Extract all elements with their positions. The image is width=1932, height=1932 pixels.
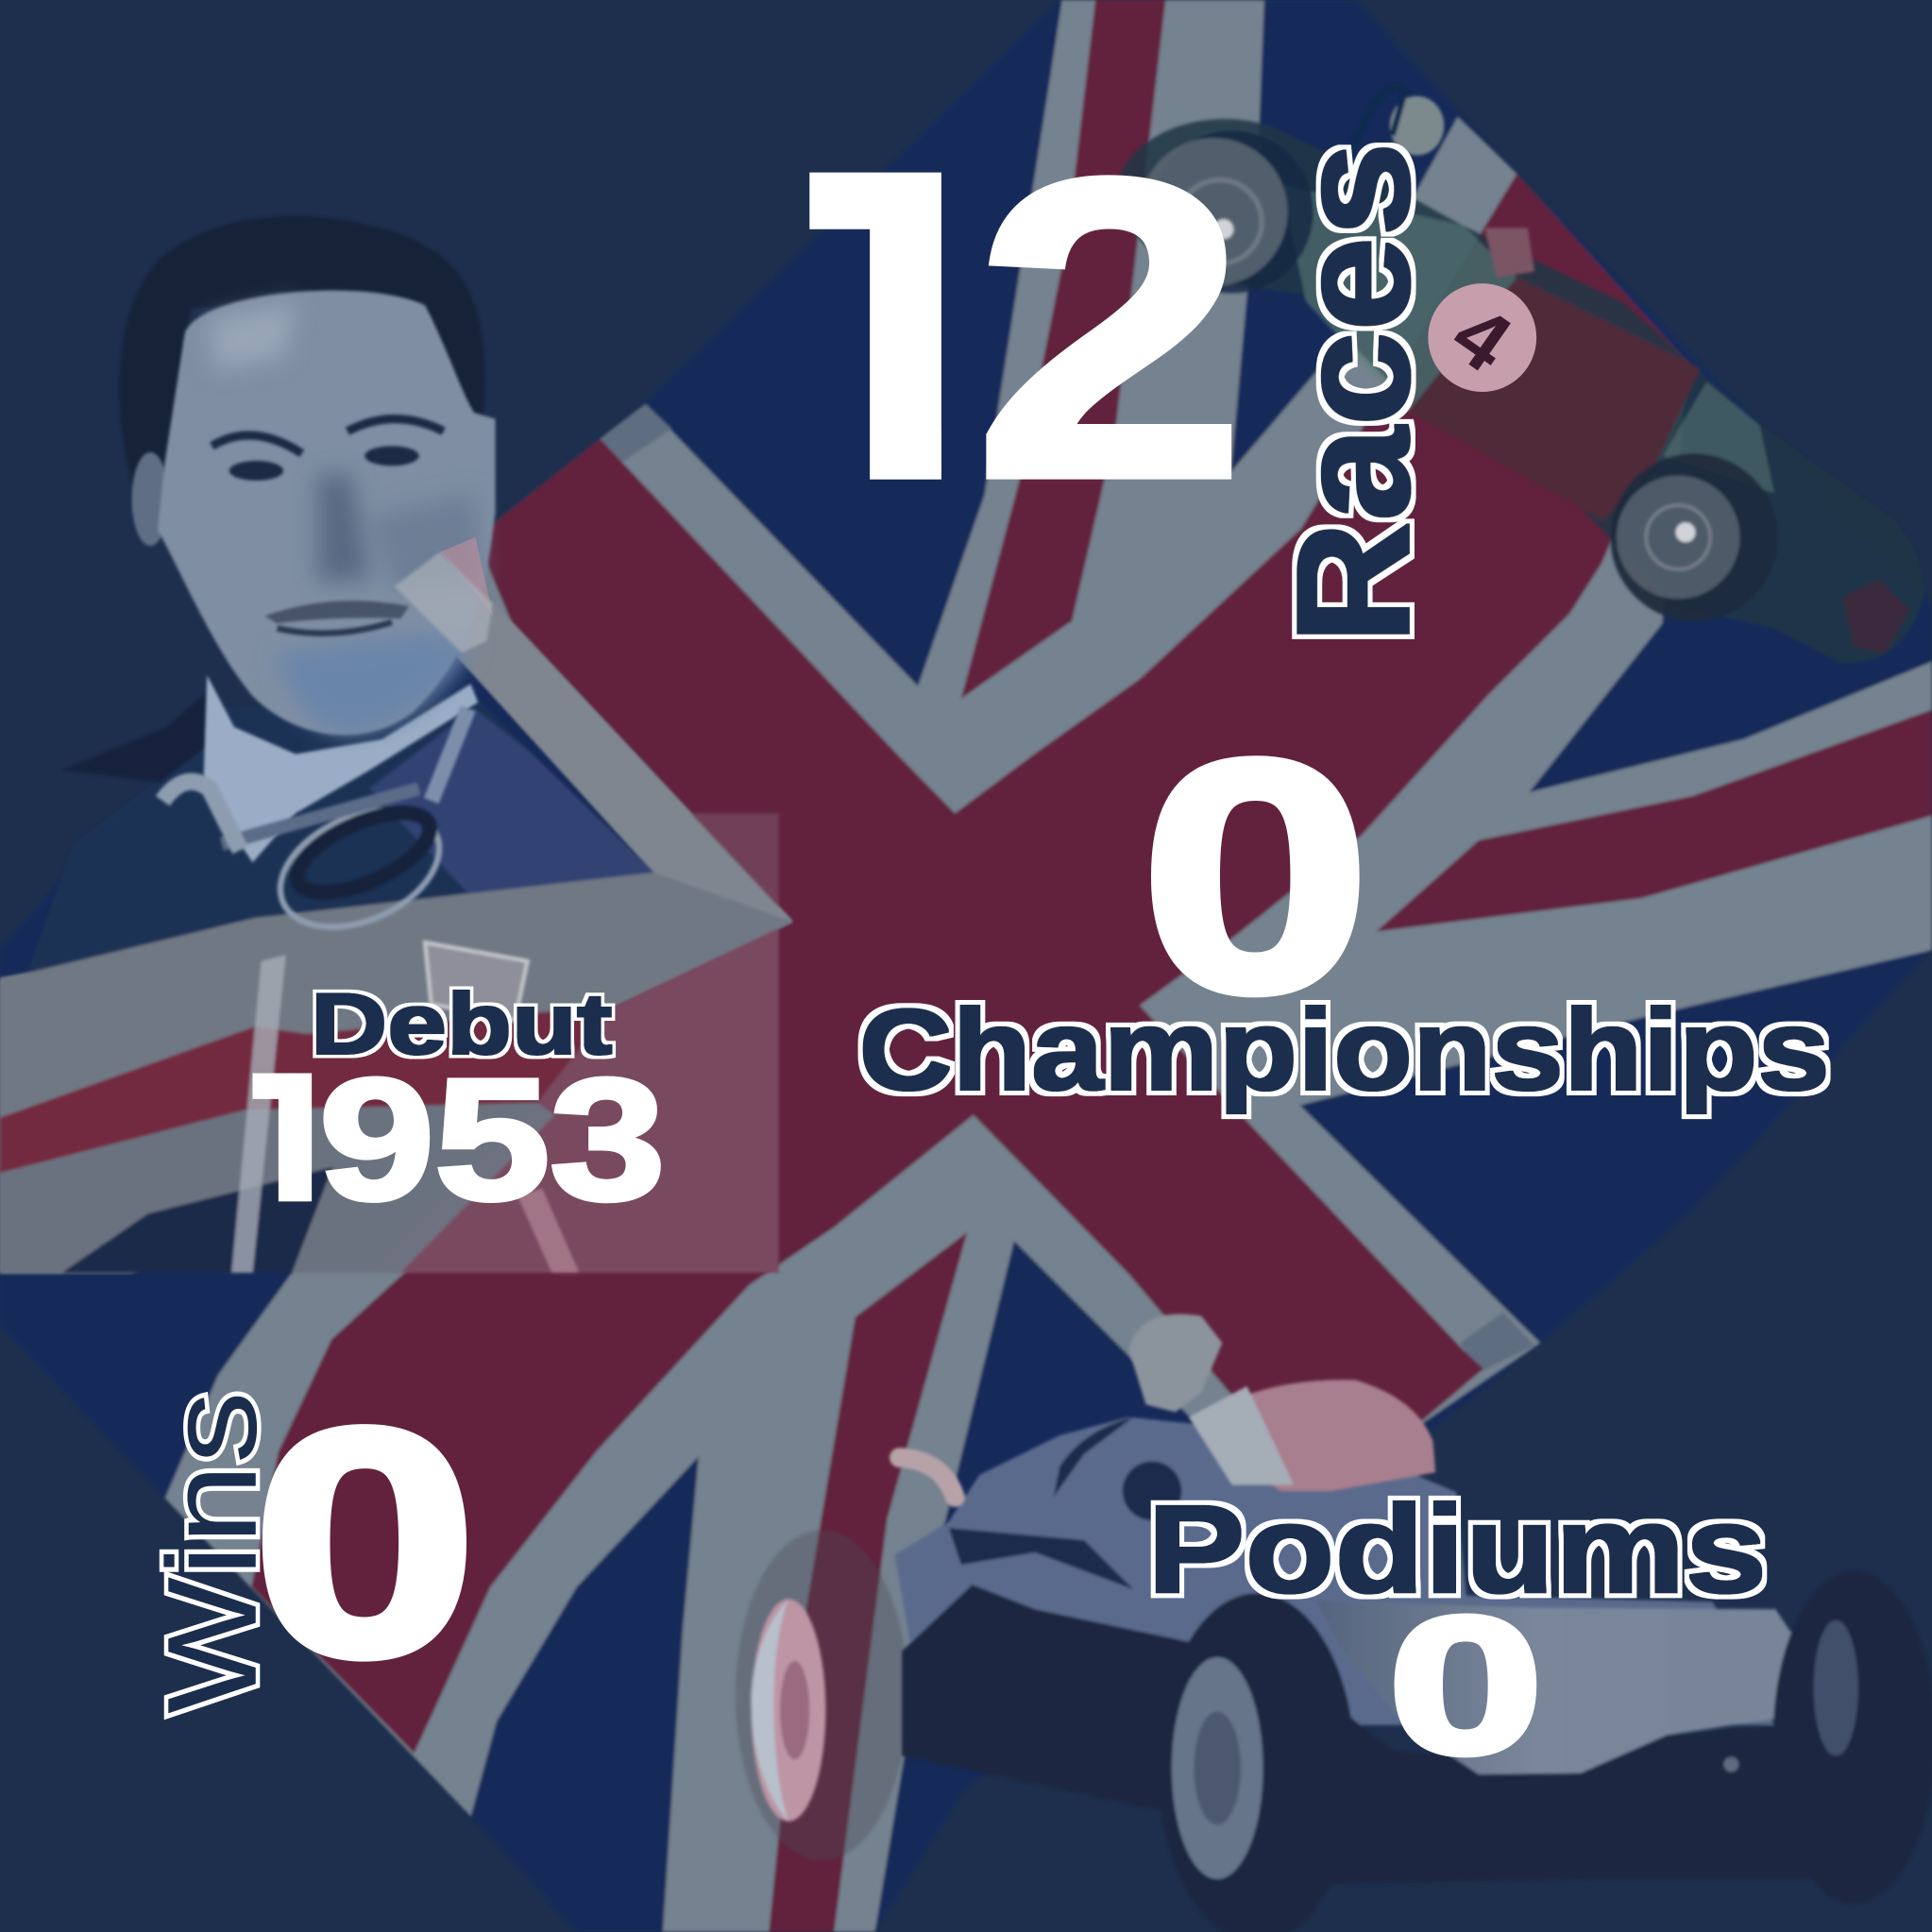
zip strap [231, 955, 286, 1273]
chest badge [425, 942, 527, 1020]
dark collar point [61, 690, 215, 783]
left ear [132, 452, 169, 546]
jacket [27, 696, 654, 974]
label debut: Debut [311, 976, 613, 1073]
light nose [1316, 1601, 1862, 1774]
flag thin red bands [769, 0, 1932, 1932]
car body [1117, 119, 1924, 663]
grey race car [736, 1314, 1932, 1932]
label championships: Championships [858, 985, 1830, 1113]
rear strut [900, 1458, 955, 1497]
cockpit dark [949, 1417, 1133, 1589]
portrait photo [0, 216, 792, 1273]
flag shaded corners [600, 404, 671, 462]
front left wheel [1159, 1593, 1355, 1932]
label wins: Wins [142, 1391, 283, 1714]
stat: podiums [1147, 1480, 1767, 1793]
rear left wheel [736, 1531, 908, 1860]
label races: Races [1263, 142, 1442, 644]
nose and cheek shading [210, 302, 481, 591]
radiator grille [1842, 579, 1910, 653]
stat: championships [858, 693, 1830, 1113]
white wedge on shoulder [395, 552, 792, 922]
red door panel [1408, 278, 1701, 520]
flag diagonal red cross [251, 174, 1688, 1754]
dark lower body [902, 1585, 1885, 1885]
number 0: 0 [1141, 693, 1370, 1059]
driver helmet [1349, 87, 1534, 278]
left red stripe [0, 1006, 614, 1173]
green race car number 4 [1117, 87, 1924, 663]
stat: wins [142, 1364, 477, 1722]
car number roundel: 4 [1436, 286, 1528, 390]
label podiums: Podiums [1147, 1480, 1767, 1618]
number 0: 0 [252, 1364, 477, 1722]
number 12 [809, 172, 1231, 480]
facial features [212, 419, 444, 634]
headrest [1213, 1380, 1435, 1491]
year 1953 [253, 1073, 661, 1203]
goggles [162, 708, 468, 950]
scarf [203, 675, 478, 862]
face [158, 290, 496, 735]
year 1953: 953 [319, 1043, 666, 1236]
pink wedge on temple [440, 537, 493, 616]
tinted photo rectangle over red [369, 922, 792, 1273]
lower jacket grey [0, 873, 792, 1117]
front right wheel [1773, 1571, 1932, 1904]
teal panel over flag [1281, 185, 1517, 412]
number 12: 1 [788, 92, 949, 567]
big stat: 12 races [809, 142, 1416, 639]
navy triangle [61, 1167, 332, 1273]
front wheel [1610, 453, 1778, 621]
nose hole [1723, 1757, 1738, 1771]
number 0: 0 [1389, 1578, 1543, 1793]
number 12: 2 [974, 92, 1247, 567]
hair [119, 216, 484, 486]
driver helmet [1128, 1314, 1222, 1412]
lower face blue tint [278, 635, 474, 734]
pale band into red [369, 1103, 554, 1273]
year 1953: 1 [250, 1043, 312, 1236]
stat: debut [253, 986, 661, 1203]
car body [894, 1417, 1774, 1725]
rear wheel [1140, 130, 1313, 294]
lower grey stripe [0, 1103, 537, 1273]
